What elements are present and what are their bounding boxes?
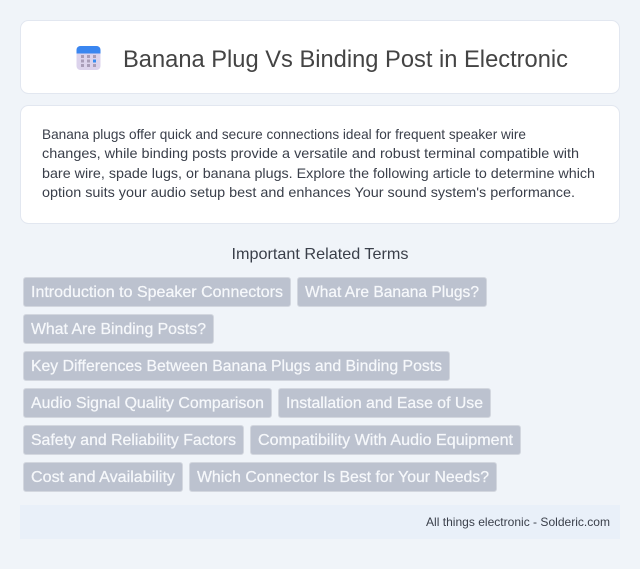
chip: introduction (24, 278, 290, 306)
chip: banana plugs: What Are Banana Plugs? (305, 284, 479, 301)
text block: intro paragraph: changes, while binding posts provide a versatile and robust terminal compatible with (42, 145, 579, 161)
chip: signal quality: Audio Signal Quality Comparison (31, 395, 264, 412)
chip: key differences (24, 352, 450, 380)
chip: key differences: Key Differences Between Banana Plugs and Binding Posts (31, 358, 442, 375)
chip: which connector (190, 462, 496, 492)
text block: intro paragraph: bare wire, spade lugs, or banana plugs. Explore the following article to determine which (42, 165, 595, 181)
panel: term chips (24, 278, 520, 492)
chip: cost: Cost and Availability (31, 469, 175, 486)
chip: safety: Safety and Reliability Factors (31, 432, 236, 449)
footer: All things electronic - Solderic.com (426, 515, 610, 529)
heading: related terms: Important Related Terms (232, 246, 408, 263)
text block: intro paragraph: option suits your audio setup best and enhances Your sound system's performance. (42, 184, 575, 200)
footer (20, 505, 620, 539)
chip: installation: Installation and Ease of Use (286, 395, 483, 412)
text block: intro paragraph: Banana plugs offer quick and secure connections ideal for frequent speaker wire (42, 126, 526, 142)
chip: banana plugs (298, 278, 486, 306)
panel: introduction (20, 106, 620, 224)
text block: intro paragraph (42, 126, 595, 200)
title: Banana Plug Vs Binding Post in Electronic (123, 46, 568, 73)
chip: binding posts (24, 314, 214, 344)
chip: safety (24, 426, 244, 454)
chip: introduction: Introduction to Speaker Connectors (31, 284, 283, 301)
chip: binding posts: What Are Binding Posts? (31, 321, 206, 338)
chip: installation (278, 388, 490, 418)
chip: compatibility: Compatibility With Audio Equipment (258, 432, 514, 449)
icon: calendar (76, 46, 100, 70)
chip: signal quality (24, 388, 272, 418)
chip: compatibility (250, 426, 520, 454)
panel: header card (20, 20, 620, 94)
chip: which connector: Which Connector Is Best for Your Needs? (197, 469, 489, 486)
chip: cost (24, 462, 182, 492)
